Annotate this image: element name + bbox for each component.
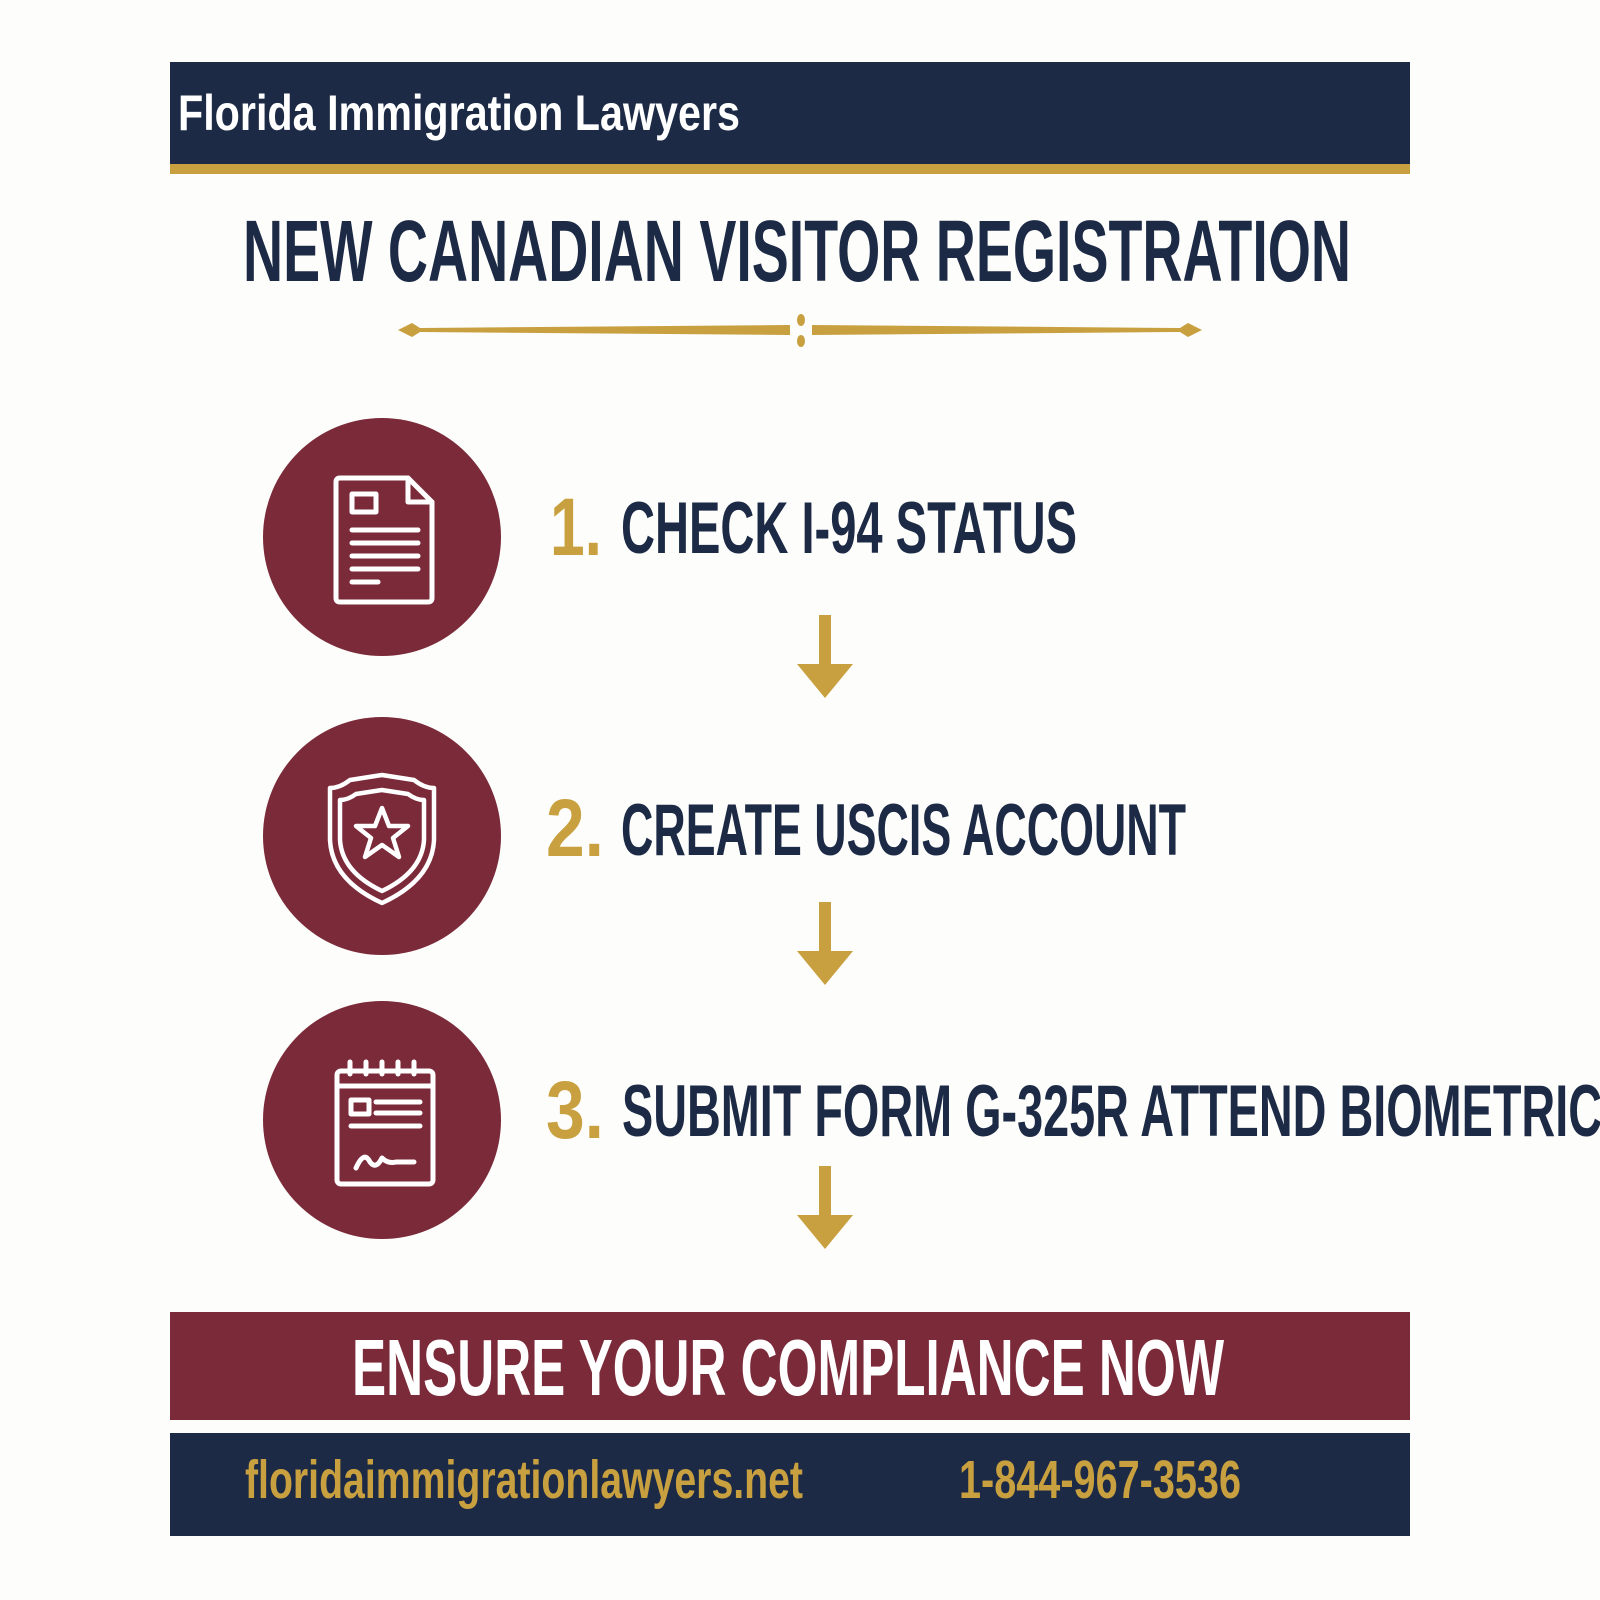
arrow 1: [797, 615, 853, 698]
step 2 text: CREATE USCIS ACCOUNT: [621, 790, 1186, 871]
call to action banner: [170, 1312, 1410, 1420]
phone: 1-844-967-3536: [959, 1450, 1241, 1510]
header bar: [170, 62, 1410, 174]
step 2 text: 2.: [546, 783, 604, 874]
step 1 text: CHECK I-94 STATUS: [621, 488, 1077, 569]
step 1 icon: document: [263, 418, 501, 656]
step 1 text: 1.: [550, 482, 602, 573]
arrow 3: [797, 1166, 853, 1249]
step 3 icon: form with signature: [263, 1001, 501, 1239]
contact footer: [170, 1433, 1410, 1536]
step 2 text: [546, 783, 1186, 874]
step 2 icon: shield with star: [263, 717, 501, 955]
arrow 2: [797, 902, 853, 985]
website: floridaimmigrationlawyers.net: [245, 1450, 803, 1510]
step 3 text: 3.: [546, 1065, 604, 1156]
header text: Florida Immigration Lawyers: [178, 85, 740, 141]
ornamental divider: [398, 314, 1202, 347]
step 1 text: [550, 482, 1077, 573]
